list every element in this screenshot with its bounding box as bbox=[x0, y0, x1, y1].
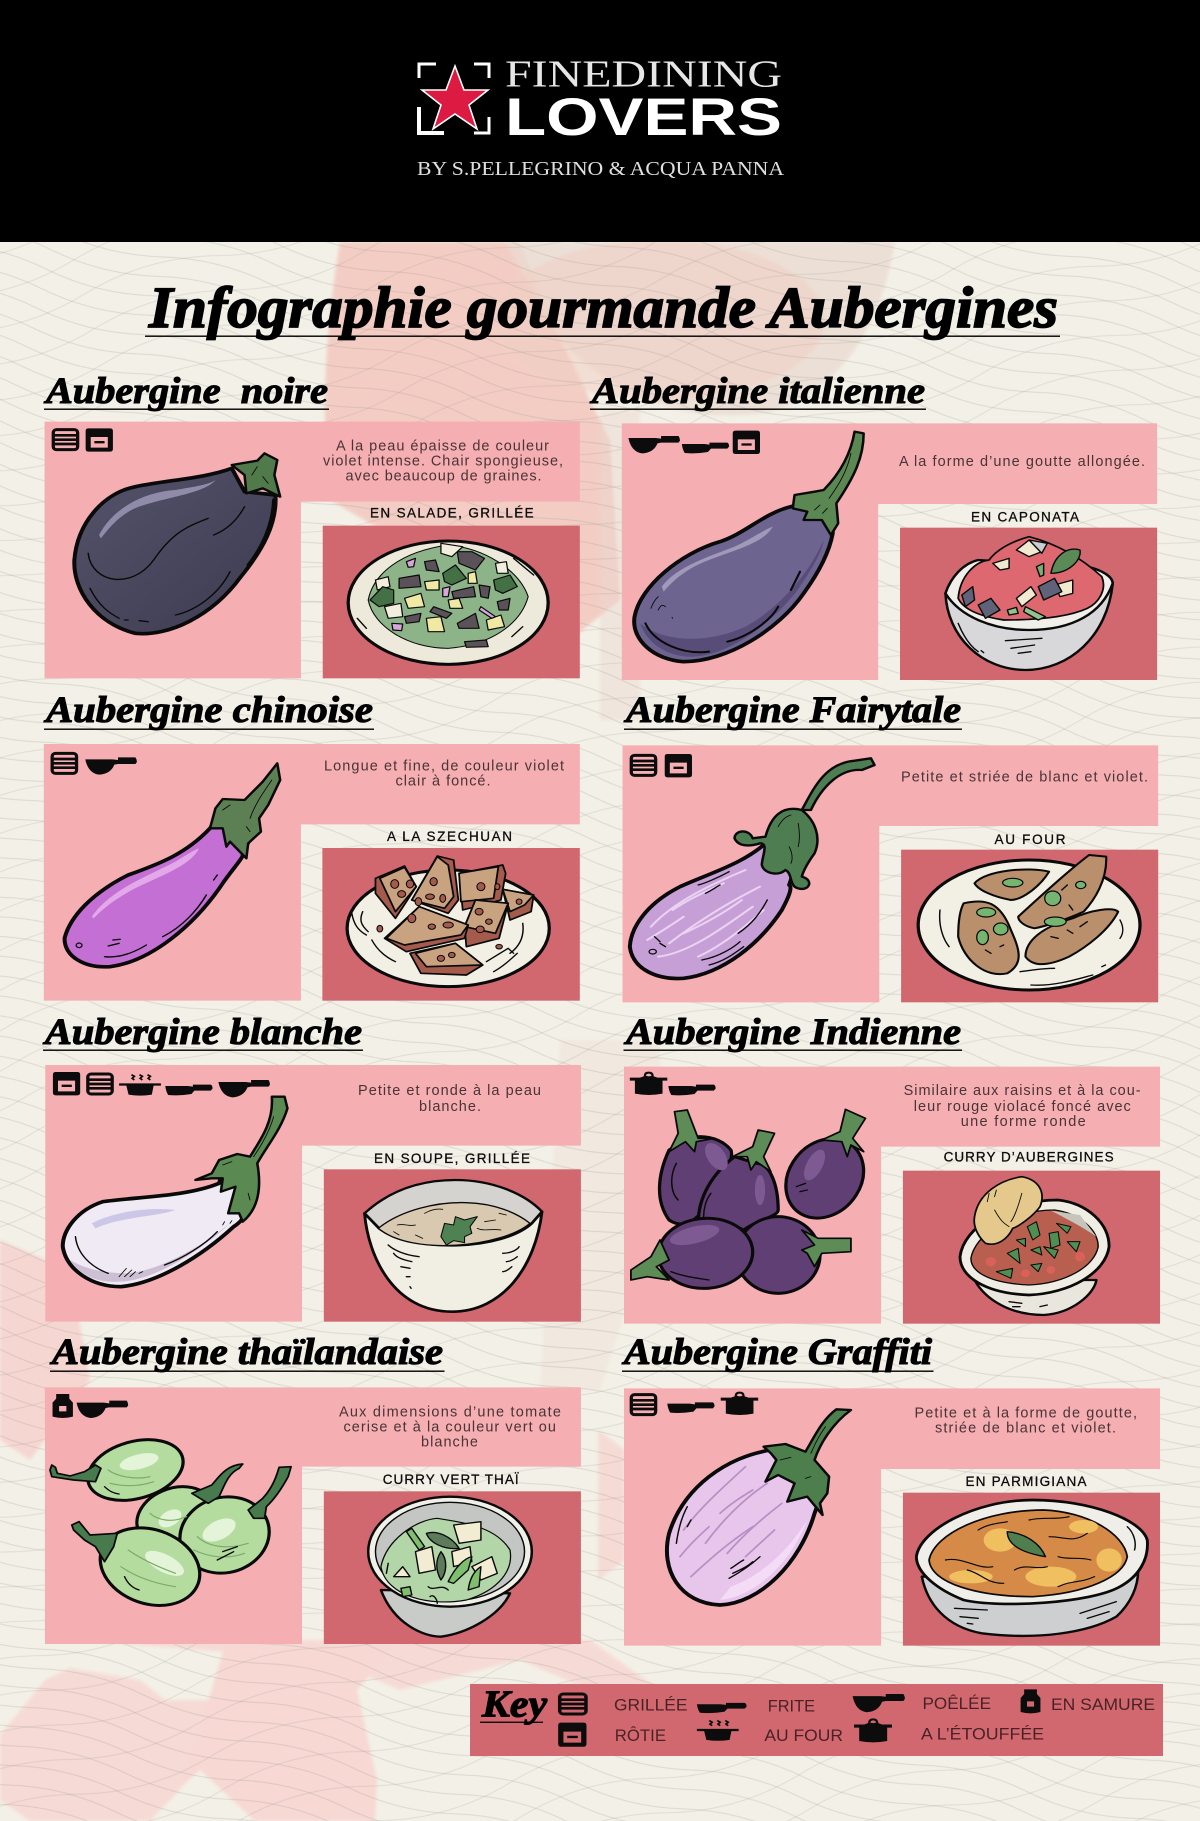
dish label: EN PARMIGIANA bbox=[966, 1474, 1086, 1489]
cooking icons bbox=[53, 1072, 270, 1097]
panel: aubergine thaïlandaise bbox=[45, 1332, 581, 1644]
heading: aubergine graffiti: Aubergine Graffiti bbox=[622, 1332, 933, 1373]
card background bbox=[45, 422, 580, 678]
key background bbox=[470, 1684, 1163, 1756]
description bbox=[914, 1406, 1137, 1437]
panel: aubergine indienne bbox=[624, 1012, 1160, 1324]
heading: aubergine indienne: Aubergine Indienne bbox=[624, 1012, 961, 1053]
cooking icons bbox=[52, 753, 137, 775]
key labels: EN SAMURE bbox=[1051, 1695, 1155, 1714]
illustration: italian aubergine bbox=[634, 432, 864, 662]
description: striée de blanc et violet. bbox=[935, 1421, 1116, 1437]
card background bbox=[624, 1067, 1160, 1324]
card background bbox=[45, 1065, 581, 1322]
dish label: AU FOUR bbox=[994, 832, 1066, 847]
header band with logo bbox=[0, 0, 1200, 242]
illustration: graffiti aubergine bbox=[667, 1409, 851, 1605]
panel: aubergine fairytale bbox=[623, 690, 1158, 1002]
key labels: POÊLÉE bbox=[922, 1694, 991, 1713]
dish label: EN CAPONATA bbox=[971, 510, 1079, 525]
heading: aubergine blanche: Aubergine blanche bbox=[43, 1012, 362, 1053]
cooking icons bbox=[631, 754, 692, 777]
dish label: A LA SZECHUAN bbox=[387, 829, 512, 844]
cooking icons bbox=[628, 431, 760, 454]
description: Aux dimensions d’une tomate bbox=[339, 1405, 561, 1421]
heading: aubergine fairytale: Aubergine Fairytale bbox=[624, 690, 961, 731]
description bbox=[339, 1405, 561, 1451]
description: Longue et fine, de couleur violet bbox=[324, 759, 564, 775]
description: cerise et à la couleur vert ou bbox=[344, 1420, 556, 1436]
card background bbox=[44, 744, 580, 1001]
dish label: EN SALADE, GRILLÉE bbox=[370, 506, 534, 521]
description bbox=[904, 1083, 1141, 1130]
description: avec beaucoup de graines. bbox=[346, 469, 542, 485]
panel: aubergine graffiti bbox=[622, 1332, 1160, 1646]
description: Similaire aux raisins et à la cou- bbox=[904, 1083, 1141, 1099]
heading: aubergine italienne: Aubergine italienne bbox=[590, 371, 925, 412]
dish label: CURRY D’AUBERGINES bbox=[944, 1150, 1114, 1165]
panel: aubergine chinoise bbox=[44, 690, 580, 1001]
description bbox=[324, 759, 564, 790]
dish label: CURRY VERT THAÏ bbox=[383, 1472, 519, 1487]
card background bbox=[624, 1388, 1160, 1646]
key labels: A L’ÉTOUFFÉE bbox=[921, 1724, 1044, 1743]
description: Petite et striée de blanc et violet. bbox=[901, 770, 1148, 786]
key heading: Key bbox=[481, 1684, 547, 1726]
description: A la peau épaisse de couleur bbox=[336, 439, 549, 455]
logo lower-left corner bbox=[419, 107, 444, 133]
key icons bbox=[558, 1689, 1040, 1747]
key labels: AU FOUR bbox=[764, 1726, 843, 1745]
logo wordmark bottom: LOVERS bbox=[505, 88, 782, 147]
key labels: FRITE bbox=[768, 1696, 815, 1715]
key labels bbox=[614, 1694, 1155, 1745]
key labels: GRILLÉE bbox=[614, 1696, 688, 1715]
cooking icons bbox=[53, 1394, 128, 1418]
illustration: dark aubergine bbox=[74, 453, 280, 634]
cooking icons bbox=[630, 1072, 716, 1095]
description: blanche. bbox=[419, 1099, 481, 1115]
illustration: baked aubergine plate bbox=[918, 855, 1140, 990]
card background bbox=[623, 745, 1158, 1002]
card background bbox=[45, 1387, 581, 1644]
illustration: thai aubergines bbox=[50, 1429, 291, 1620]
illustration: caponata bowl bbox=[945, 537, 1113, 670]
logo tagline: BY S.PELLEGRINO & ACQUA PANNA bbox=[417, 159, 784, 180]
description bbox=[323, 439, 563, 485]
description: A la forme d’une goutte allongée. bbox=[899, 454, 1145, 470]
description: violet intense. Chair spongieuse, bbox=[323, 454, 563, 470]
cooking icons bbox=[631, 1392, 758, 1415]
illustration: chinese aubergine bbox=[65, 763, 280, 967]
title: Infographie gourmande Aubergines bbox=[148, 275, 1058, 340]
description: leur rouge violacé foncé avec bbox=[914, 1099, 1131, 1115]
description: Petite et ronde à la peau bbox=[358, 1083, 541, 1099]
illustration: green curry bowl bbox=[368, 1497, 532, 1637]
panel: aubergine italienne bbox=[590, 371, 1157, 680]
heading: aubergine chinoise: Aubergine chinoise bbox=[44, 690, 373, 731]
description: blanche bbox=[421, 1435, 478, 1451]
description bbox=[358, 1083, 541, 1115]
illustration: soup bowl bbox=[365, 1180, 542, 1312]
illustration: white aubergine bbox=[63, 1097, 287, 1287]
card background bbox=[622, 423, 1157, 680]
description: Petite et à la forme de goutte, bbox=[914, 1406, 1137, 1422]
illustration: szechuan toast plate bbox=[347, 856, 549, 987]
panel: aubergine noire bbox=[44, 371, 580, 678]
logo wordmark top: FINEDINING bbox=[505, 54, 782, 96]
panel: aubergine blanche bbox=[43, 1012, 581, 1322]
illustration: parmigiana dish bbox=[916, 1500, 1147, 1636]
logo frame corners bbox=[419, 64, 489, 133]
illustration: fairytale aubergine bbox=[630, 758, 875, 979]
heading: aubergine noire: Aubergine noire bbox=[44, 371, 328, 412]
illustration: salad plate bbox=[348, 541, 548, 664]
heading: aubergine thaïlandaise: Aubergine thaïlandaise bbox=[50, 1332, 443, 1373]
description: clair à foncé. bbox=[396, 774, 490, 790]
illustration: indian aubergines bbox=[631, 1109, 879, 1293]
cooking icons bbox=[53, 428, 113, 452]
logo star bbox=[422, 66, 488, 129]
key legend bbox=[470, 1684, 1163, 1756]
key labels: RÔTIE bbox=[615, 1726, 666, 1745]
description: une forme ronde bbox=[961, 1114, 1086, 1130]
illustration: curry bowl bbox=[960, 1177, 1109, 1315]
dish label: EN SOUPE, GRILLÉE bbox=[374, 1151, 530, 1166]
